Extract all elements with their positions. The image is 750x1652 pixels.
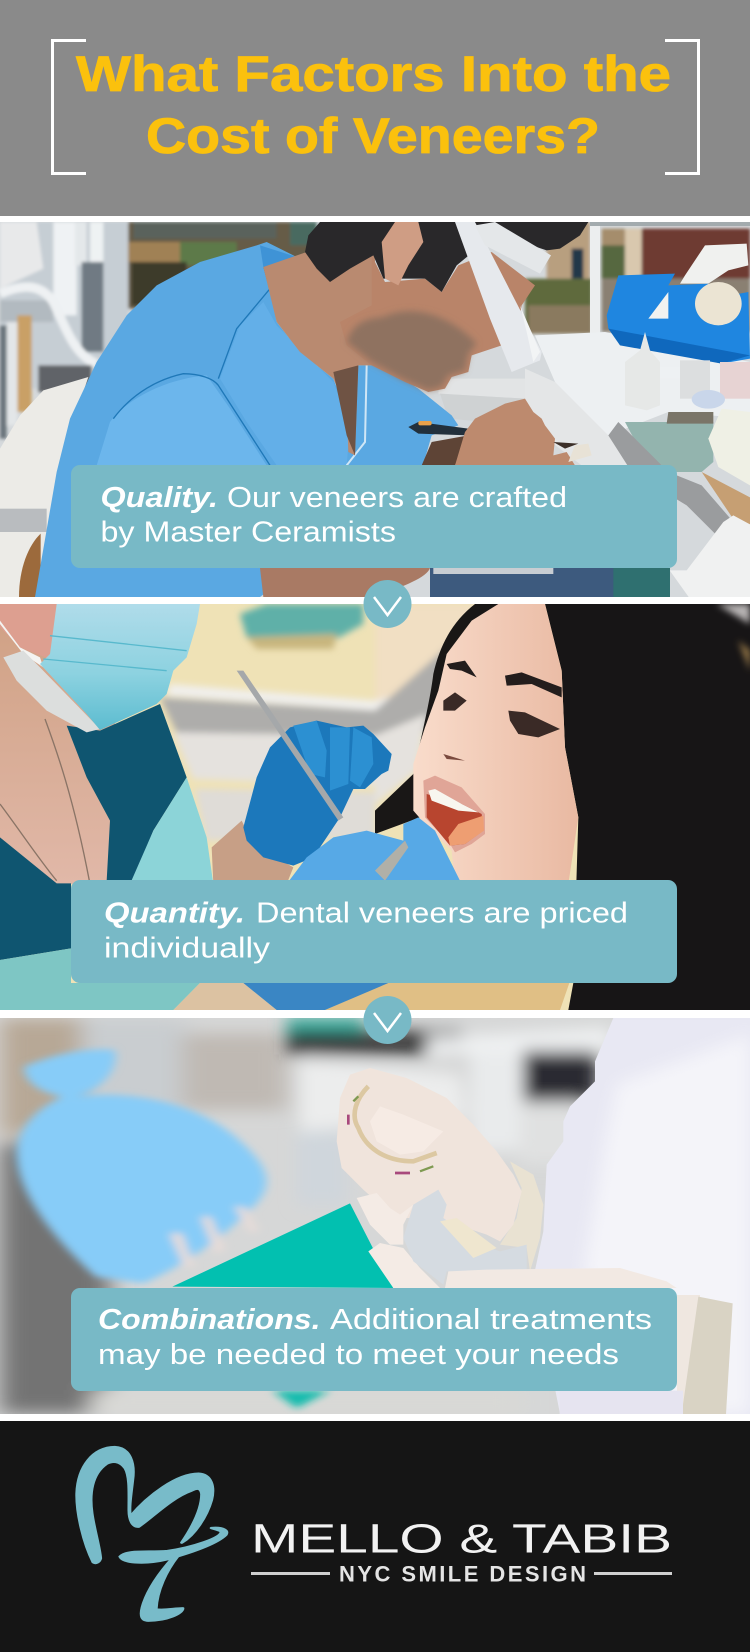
arrow: quality to quantity [364, 580, 412, 628]
nose [443, 754, 465, 761]
callout: quantity: individually [104, 932, 271, 964]
photo: patient at the dentist [0, 604, 750, 1010]
forearm [422, 435, 468, 465]
forearm below callout [260, 568, 430, 597]
lower hand [445, 1268, 677, 1288]
panel: footer [0, 1421, 750, 1652]
glove dark [243, 721, 392, 866]
callout: quality: Quality. [100, 482, 218, 514]
callout: quality: Our veneers are crafted [227, 482, 567, 514]
machine lower left [0, 377, 88, 597]
photo: technician crafting veneers [0, 222, 750, 597]
dentist skin base [0, 604, 115, 884]
hair left [375, 604, 500, 834]
necklace [0, 719, 89, 881]
pliers [375, 841, 408, 881]
lower sleeve strip [560, 1391, 683, 1414]
bottles [625, 332, 660, 410]
cuff [500, 1161, 543, 1271]
beard [347, 311, 477, 390]
face [413, 604, 578, 884]
logo tagline: NYC SMILE DESIGN [339, 1562, 586, 1586]
callout: quality: by Master Ceramists [100, 516, 396, 548]
mask band [3, 651, 100, 732]
callout: quantity: Quantity. [104, 898, 245, 930]
glove light [287, 817, 462, 884]
mouth [427, 794, 483, 846]
bottom strip glove [243, 983, 388, 1010]
scrubs light [130, 777, 213, 884]
logo icon [75, 1446, 228, 1622]
title: Cost of Veneers? [146, 108, 600, 164]
bottom table [430, 568, 670, 597]
mask [40, 604, 200, 730]
cuff lower [682, 1297, 733, 1414]
bottom strip gold [325, 983, 569, 1010]
arrow: quantity to combinations [364, 996, 412, 1044]
counter [535, 332, 750, 435]
logo wordmark: MELLO & TABIB [251, 1516, 672, 1562]
glove wrist right of callout [677, 1295, 700, 1414]
tray on table [240, 604, 363, 647]
arm [212, 821, 293, 884]
face [340, 252, 535, 392]
teal lower piece [273, 1391, 330, 1408]
brush [408, 422, 468, 435]
fingers [357, 1193, 413, 1245]
hair [305, 222, 588, 292]
blue chair [17, 1049, 266, 1283]
callout: quality [71, 465, 677, 568]
hand [455, 399, 575, 465]
retainer [355, 1086, 437, 1161]
chair buttons [170, 1207, 258, 1267]
blue bins [607, 274, 750, 364]
callout: combinations: Combinations. [98, 1304, 320, 1336]
upper hand glove [337, 1068, 522, 1241]
tray [625, 422, 713, 472]
dental cast [403, 1190, 527, 1285]
eyebrows [447, 661, 562, 697]
bracket frame [52, 40, 698, 174]
lips [423, 776, 485, 852]
bottom strip skin [173, 983, 277, 1010]
teal seat [172, 1203, 393, 1288]
cabinet [167, 684, 400, 711]
neck [263, 252, 375, 455]
panel: title header [0, 0, 750, 216]
visor [455, 222, 542, 372]
callout: combinations: Additional treatments [330, 1304, 652, 1336]
scrubs dark [67, 704, 187, 881]
title: What Factors Into the [76, 46, 671, 102]
ear [382, 222, 423, 285]
callout: combinations: may be needed to meet your needs [98, 1339, 619, 1371]
callout: combinations [71, 1288, 677, 1391]
scrubs [35, 242, 430, 597]
lab coat [533, 1018, 750, 1414]
callout: quantity: Dental veneers are priced [256, 898, 628, 930]
eyes [443, 692, 560, 737]
instrument [237, 671, 343, 821]
callout: quantity [71, 880, 677, 983]
dentist cheek [0, 604, 57, 659]
photo: gloved hands with dental retainer [0, 1018, 750, 1414]
hair right [545, 604, 750, 1010]
